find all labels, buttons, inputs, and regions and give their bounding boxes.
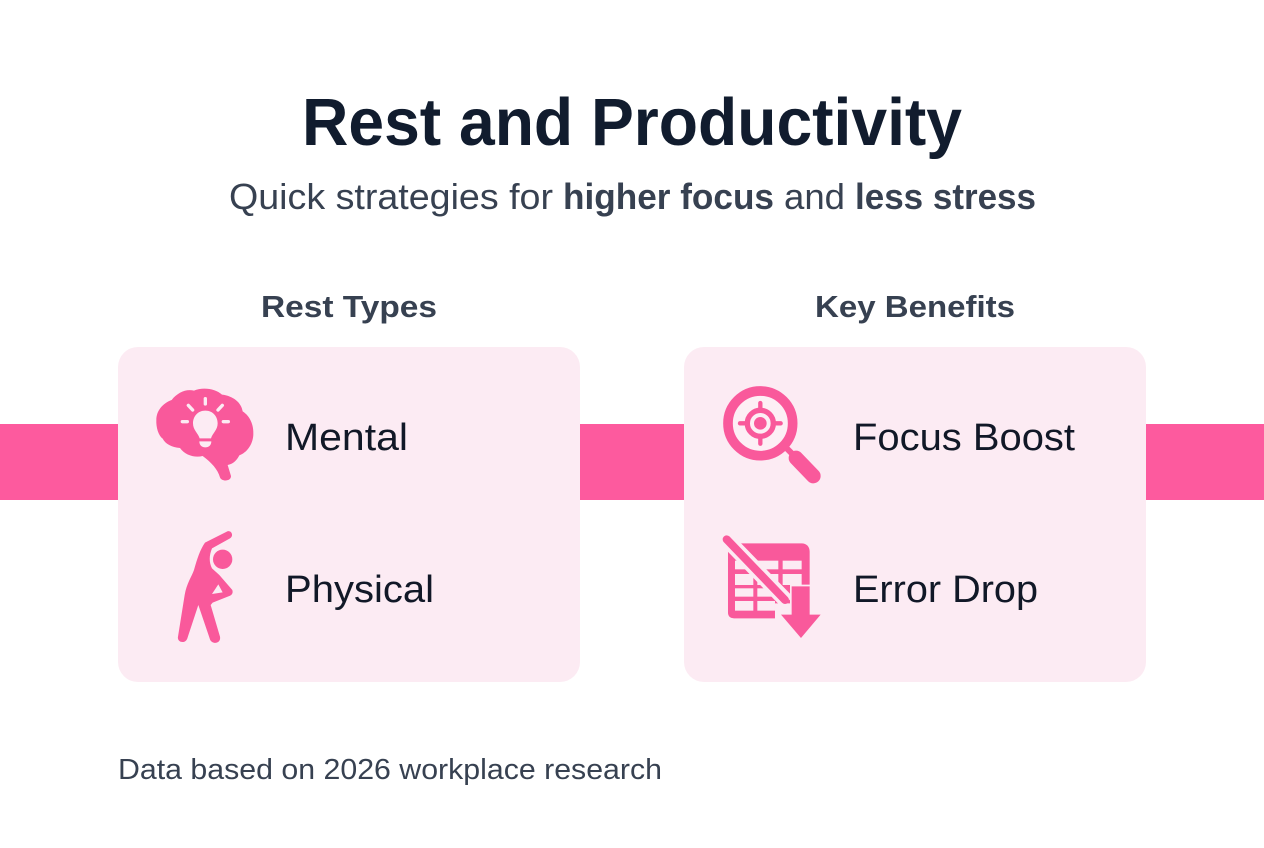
heading: rest types: Rest Types: [261, 289, 437, 324]
subtitle: higher focus: [563, 176, 774, 217]
subtitle: Quick strategies for: [229, 176, 553, 217]
icon: table with error drop arrow: [722, 535, 821, 638]
label: error drop: Error Drop: [853, 569, 1038, 611]
icon: magnifier with target: [728, 391, 813, 476]
subtitle: and: [784, 176, 845, 217]
icon: brain with light bulb: [156, 389, 253, 480]
heading: key benefits: Key Benefits: [815, 289, 1015, 324]
panel: key benefits: [684, 347, 1146, 682]
subtitle: [229, 176, 1036, 217]
panel: rest types: [118, 347, 580, 682]
label: mental: Mental: [285, 417, 408, 459]
label: physical: Physical: [285, 569, 434, 611]
label: focus boost: Focus Boost: [853, 417, 1075, 459]
icon: person stretching: [178, 531, 233, 643]
subtitle: less stress: [855, 176, 1036, 217]
footnote: Data based on 2026 workplace research: [118, 754, 662, 786]
title: Rest and Productivity: [302, 85, 962, 160]
horizontal pink band: [0, 424, 1264, 500]
